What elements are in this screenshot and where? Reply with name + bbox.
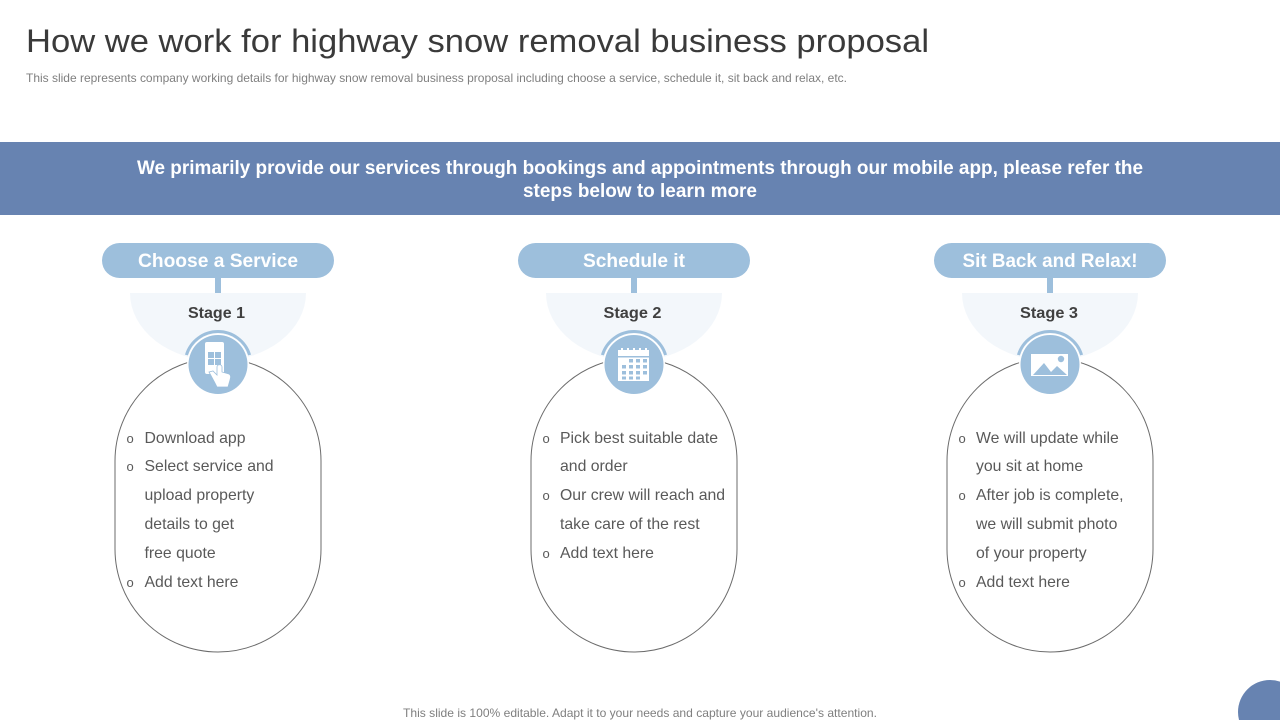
bullet list: of your property	[976, 545, 1087, 562]
bullet list: o	[126, 459, 134, 474]
panel: stage 3	[934, 243, 1166, 652]
icon: calendar	[618, 348, 649, 381]
bullet list: Select service and	[144, 458, 274, 475]
icon: phone with tapping hand	[205, 342, 231, 387]
bullet list: o	[958, 575, 966, 590]
footer note: This slide is 100% editable. Adapt it to your needs and capture your audience's attention.	[403, 706, 877, 720]
bullet list: o	[958, 488, 966, 503]
banner: We primarily provide our services through bookings and appointments through our mobile app, please refer the	[137, 158, 1143, 179]
bullet list: Download app	[144, 430, 246, 447]
bullet list	[126, 430, 274, 591]
label: Stage 3: Stage 3	[1020, 305, 1078, 322]
title: How we work for highway snow removal business proposal	[26, 23, 929, 59]
subtitle: This slide represents company working details for highway snow removal business proposal including choose a service, schedule it, sit back and relax, etc.	[26, 71, 847, 85]
corner circle	[1238, 680, 1280, 720]
bullet list: Add text here	[144, 574, 239, 591]
bullet list: o	[542, 488, 550, 503]
bullet list: o	[542, 431, 550, 446]
bullet list: upload property	[144, 487, 254, 504]
bullet list: Our crew will reach and	[560, 487, 725, 504]
banner: steps below to learn more	[523, 181, 757, 202]
bullet list: After job is complete,	[976, 487, 1124, 504]
bullet list: Add text here	[976, 574, 1070, 591]
bullet list: free quote	[144, 545, 216, 562]
heading: Sit Back and Relax!: Sit Back and Relax!	[962, 250, 1138, 272]
bullet list: o	[126, 575, 134, 590]
bullet list: we will submit photo	[975, 516, 1118, 533]
bullet list: We will update while	[976, 430, 1119, 447]
bullet list: o	[126, 431, 134, 446]
banner	[0, 142, 1280, 215]
bullet list: o	[542, 546, 550, 561]
bullet list	[958, 430, 1124, 591]
bullet list	[542, 430, 725, 562]
heading: Choose a Service: Choose a Service	[138, 250, 298, 272]
icon: picture	[1031, 354, 1068, 376]
heading: Schedule it: Schedule it	[583, 250, 685, 272]
label: Stage 1: Stage 1	[188, 305, 245, 322]
bullet list: o	[958, 431, 966, 446]
bullet list: and order	[560, 458, 628, 475]
panel: stage 1	[102, 243, 334, 652]
bullet list: take care of the rest	[560, 516, 700, 533]
bullet list: Pick best suitable date	[560, 430, 718, 447]
label: Stage 2: Stage 2	[604, 305, 662, 322]
bullet list: Add text here	[560, 545, 654, 562]
bullet list: you sit at home	[976, 458, 1083, 475]
panel: stage 2	[518, 243, 750, 652]
bullet list: details to get	[144, 516, 235, 533]
